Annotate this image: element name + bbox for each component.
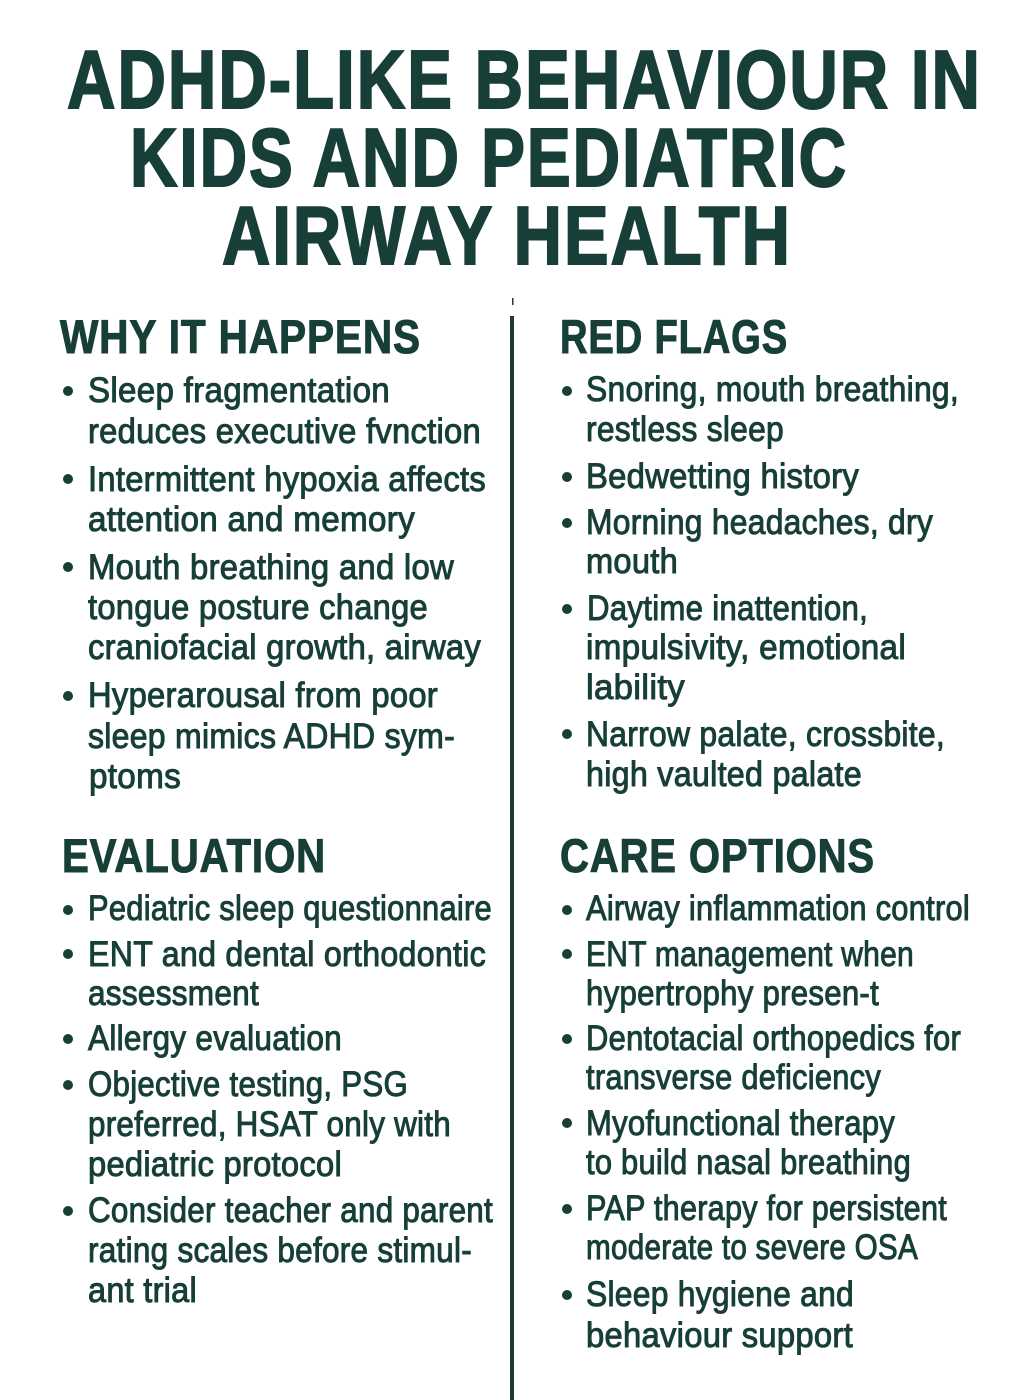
bullet: sleep hygiene xyxy=(562,1274,854,1355)
column divider xyxy=(510,298,514,1400)
title: AIRWAY HEALTH xyxy=(222,189,792,282)
panel: care options xyxy=(560,829,970,1355)
bullet: hyperarousal: sleep mimics ADHD sym- xyxy=(88,716,455,756)
bullet: sleep hygiene: behaviour support xyxy=(586,1315,853,1355)
bullet: objective testing: pediatric protocol xyxy=(88,1144,342,1184)
bullet: sleep fragmentation: Sleep fragmentation xyxy=(88,370,390,410)
bullet: rating scales: rating scales before stimul- xyxy=(88,1230,472,1270)
bullet: rating scales xyxy=(63,1190,493,1310)
title: KIDS AND PEDIATRIC xyxy=(130,111,848,204)
bullet: mouth breathing: tongue posture change xyxy=(88,587,428,627)
panel: evaluation xyxy=(62,829,493,1310)
bullet: bedwetting: Bedwetting history xyxy=(586,456,859,496)
bullet: intermittent hypoxia: Intermittent hypoxia affects xyxy=(88,459,486,499)
bullet: sleep fragmentation xyxy=(63,370,481,451)
heading: care options: CARE OPTIONS xyxy=(560,829,875,882)
bullet: ENT and dental: assessment xyxy=(88,973,259,1013)
bullet: myofunctional therapy: Myofunctional therapy xyxy=(586,1103,895,1143)
bullet: objective testing: preferred, HSAT only with xyxy=(88,1104,451,1144)
bullet: ENT management: ENT management when xyxy=(586,934,914,974)
bullet: narrow palate: high vaulted palate xyxy=(586,754,862,794)
bullet: narrow palate xyxy=(562,714,945,794)
bullet: intermittent hypoxia xyxy=(63,459,486,539)
bullet: sleep hygiene: Sleep hygiene and xyxy=(586,1274,854,1314)
bullet: snoring: restless sleep xyxy=(586,409,784,449)
bullet: dentofacial orthopedics: Dentotacial orthopedics for xyxy=(586,1018,961,1058)
bullet: objective testing: Objective testing, PSG xyxy=(88,1064,408,1104)
bullet: morning headaches xyxy=(562,502,933,581)
bullet: airway inflammation: Airway inflammation control xyxy=(586,888,970,928)
bullet: rating scales: ant trial xyxy=(88,1270,197,1310)
bullet: ENT and dental: ENT and dental orthodontic xyxy=(88,934,486,974)
bullet: PAP therapy xyxy=(562,1188,947,1267)
bullet: ENT management: hypertrophy presen-t xyxy=(586,973,879,1013)
bullet: questionnaire: Pediatric sleep questionnaire xyxy=(88,888,492,928)
bullet: daytime inattention xyxy=(562,588,906,707)
heading: why it happens: WHY IT HAPPENS xyxy=(60,310,421,363)
bullet: allergy: Allergy evaluation xyxy=(88,1018,342,1058)
bullet: morning headaches: Morning headaches, dry xyxy=(586,502,933,542)
bullet: myofunctional therapy: to build nasal breathing xyxy=(586,1142,911,1182)
heading: red flags: RED FLAGS xyxy=(560,310,788,363)
bullet: daytime inattention: Daytime inattention, xyxy=(587,588,868,628)
bullet: hyperarousal: ptoms xyxy=(89,756,181,796)
bullet: daytime inattention: impulsivity, emotional xyxy=(586,627,906,667)
bullet: objective testing xyxy=(63,1064,451,1184)
panel: red flags xyxy=(560,310,959,794)
bullet: dentofacial orthopedics xyxy=(562,1018,961,1097)
heading: evaluation: EVALUATION xyxy=(62,829,326,882)
bullet: morning headaches: mouth xyxy=(586,541,678,581)
title xyxy=(67,33,982,282)
bullet: mouth breathing: Mouth breathing and low xyxy=(88,547,454,587)
bullet: mouth breathing xyxy=(63,547,481,667)
bullet: ENT management xyxy=(562,934,914,1013)
bullet: ENT and dental xyxy=(63,934,486,1013)
panel: why it happens xyxy=(60,310,486,796)
bullet: rating scales: Consider teacher and parent xyxy=(88,1190,493,1230)
bullet: snoring: Snoring, mouth breathing, xyxy=(586,369,959,409)
bullet: PAP therapy: PAP therapy for persistent xyxy=(586,1188,947,1228)
bullet: PAP therapy: moderate to severe OSA xyxy=(586,1227,918,1267)
bullet: daytime inattention: lability xyxy=(586,667,685,707)
bullet: dentofacial orthopedics: transverse deficiency xyxy=(586,1057,881,1097)
bullet: hyperarousal xyxy=(63,675,455,796)
bullet: sleep fragmentation: reduces executive fvnction xyxy=(88,411,481,451)
bullet: hyperarousal: Hyperarousal from poor xyxy=(88,675,438,715)
bullet: myofunctional therapy xyxy=(562,1103,911,1182)
bullet: snoring xyxy=(562,369,959,449)
bullet: narrow palate: Narrow palate, crossbite, xyxy=(586,714,945,754)
bullet: intermittent hypoxia: attention and memory xyxy=(88,499,415,539)
bullet: mouth breathing: craniofacial growth, airway xyxy=(88,627,481,667)
